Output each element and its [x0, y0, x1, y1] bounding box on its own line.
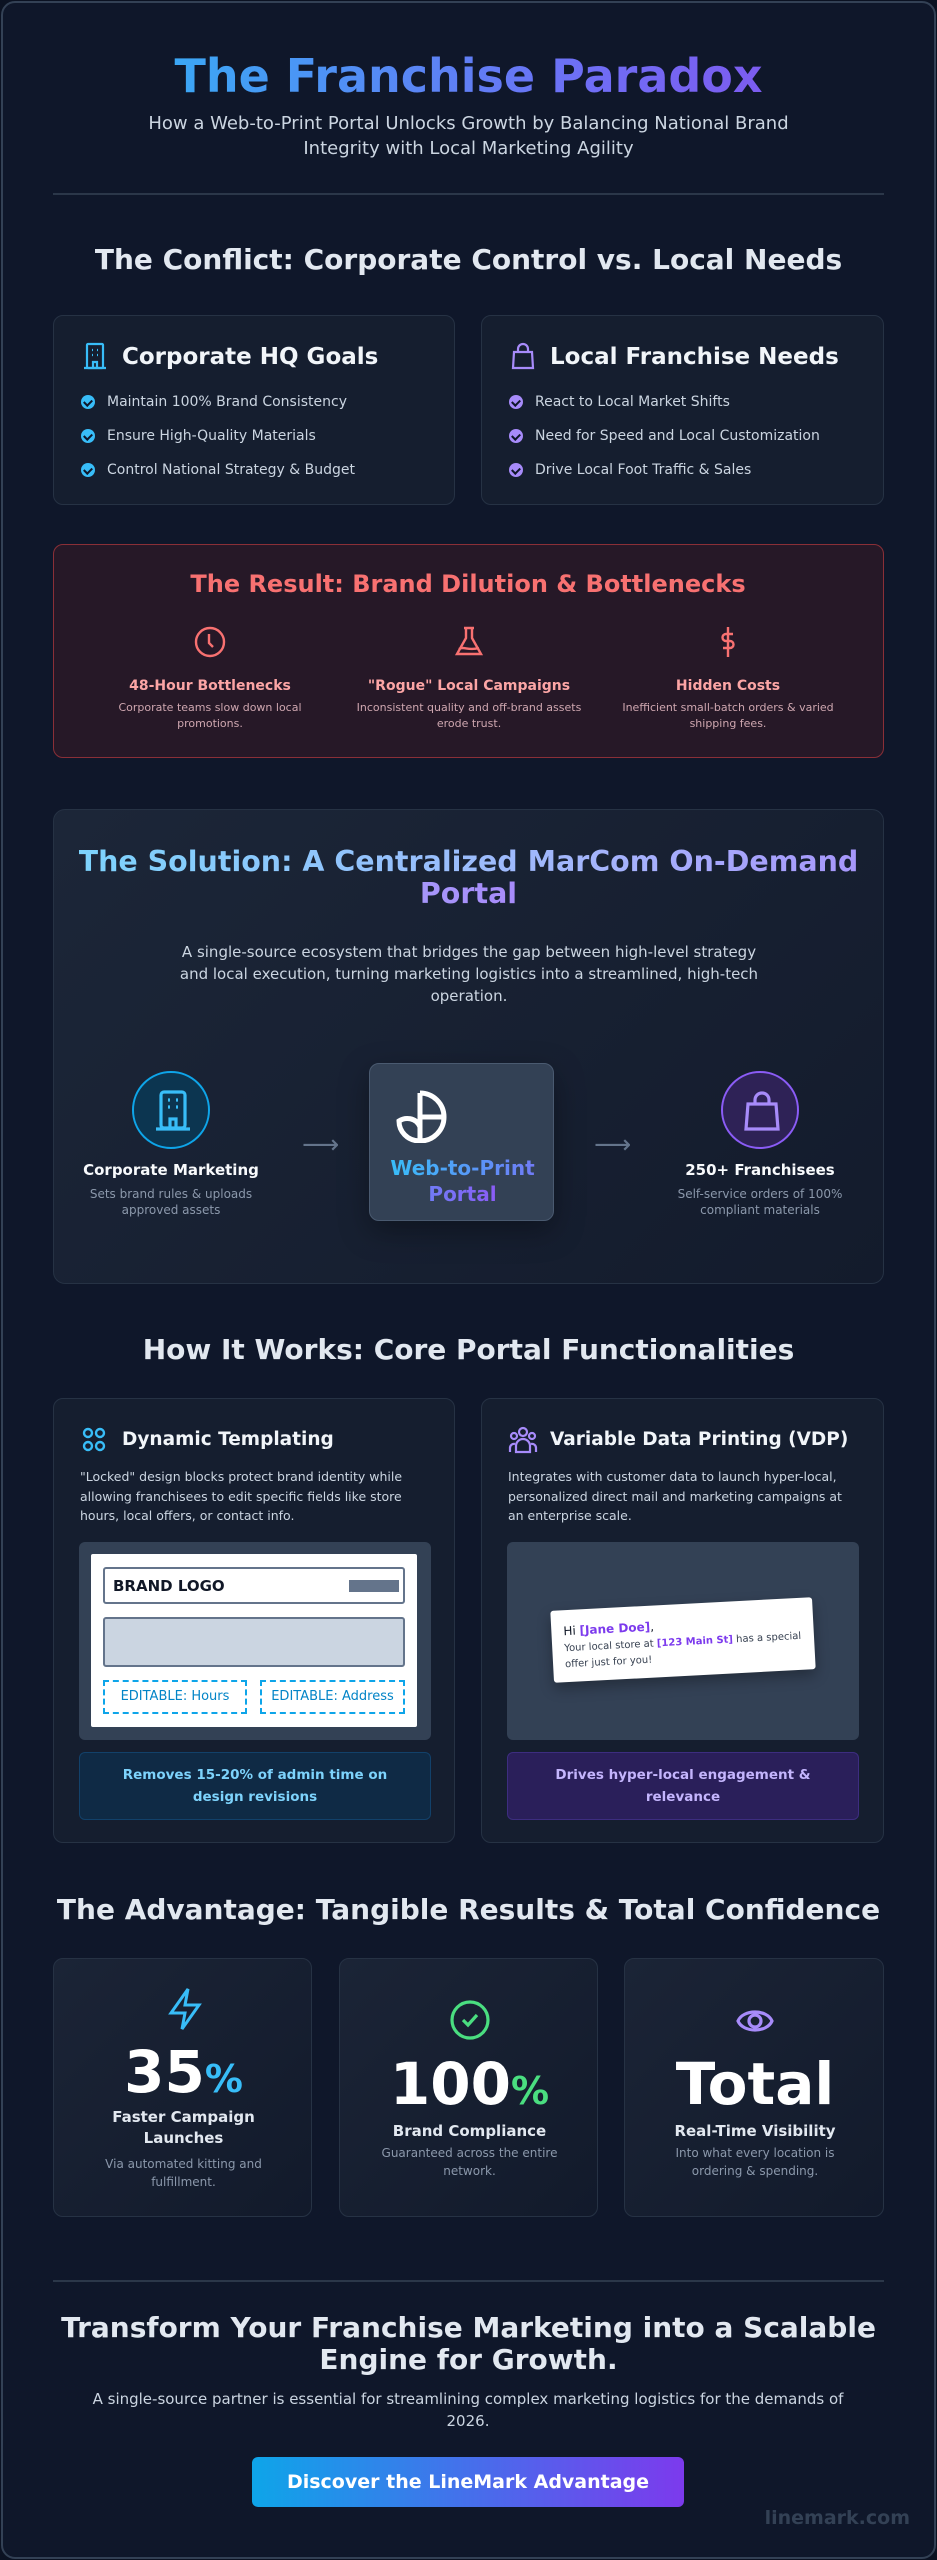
stat card: total: [624, 1958, 884, 2217]
arrow: ⟶: [594, 1130, 631, 1160]
item: rogue campaigns: "Rogue" Local Campaigns: [368, 678, 570, 694]
stat card: 100%: Brand Compliance: [393, 2122, 546, 2140]
icon: building: [84, 342, 106, 370]
icon: flask: [455, 626, 483, 656]
card description: Integrates with customer data to launch hyper-local, personalized direct mail and marketing campaigns at an enterprise scale.: [508, 1469, 842, 1523]
card heading: Local Franchise Needs: [550, 344, 839, 370]
flow: franchisees: [678, 1071, 842, 1217]
icon: grid: [82, 1428, 106, 1452]
stat card: total: Real-Time Visibility: [674, 2122, 836, 2140]
flow: corporate marketing: Sets brand rules & uploads approved assets: [90, 1187, 252, 1217]
subtitle: How a Web-to-Print Portal Unlocks Growth by Balancing National Brand Integrity with Local Marketing Agility: [148, 113, 789, 159]
heading: how it works: How It Works: Core Portal Functionalities: [143, 1333, 794, 1366]
icon: dollar: [721, 627, 735, 657]
flow: corporate marketing: Corporate Marketing: [83, 1161, 259, 1179]
item: bottlenecks: 48-Hour Bottlenecks: [129, 678, 291, 694]
flow: franchisees: 250+ Franchisees: [685, 1161, 835, 1179]
stat callout: Removes 15-20% of admin time on: [123, 1767, 387, 1783]
icon: check circle: [450, 2000, 490, 2040]
template mockup: [79, 1542, 431, 1740]
panel: result: [53, 544, 884, 758]
stat card: 100%: [339, 1958, 598, 2217]
icon: building circle: [132, 1071, 210, 1149]
flow: franchisees: Self-service orders of 100% compliant materials: [678, 1187, 842, 1217]
panel: dynamic templating: [53, 1398, 455, 1843]
item: rogue campaigns: Inconsistent quality and off-brand assets erode trust.: [357, 701, 581, 730]
title: The Franchise Paradox: [174, 49, 763, 103]
CTA button: Discover the LineMark Advantage: [287, 2471, 649, 2493]
icon: eye: [736, 2010, 774, 2032]
bullet list: Drive Local Foot Traffic & Sales: [535, 462, 751, 478]
icon: clock: [194, 626, 226, 658]
heading: conflict: The Conflict: Corporate Control vs. Local Needs: [95, 243, 842, 276]
icon: bag circle: [721, 1071, 799, 1149]
template mockup: BRAND LOGO: [113, 1577, 225, 1595]
footer brand: linemark.com: [765, 2507, 910, 2529]
heading: advantage: The Advantage: Tangible Results & Total Confidence: [57, 1893, 880, 1926]
item: bottlenecks: Corporate teams slow down local promotions.: [118, 701, 302, 730]
icon: people: [508, 1426, 538, 1454]
postcard mockup: Your local store at [123 Main St] has a special offer just for you!: [564, 1631, 801, 1670]
flow: portal box: Web-to-Print Portal: [390, 1156, 535, 1206]
flow: corporate marketing: [83, 1071, 259, 1217]
stat card: 35%: 35%: [124, 2038, 243, 2106]
card heading: Dynamic Templating: [122, 1429, 334, 1450]
stat callout: [507, 1752, 859, 1820]
template mockup: EDITABLE: Address: [271, 1689, 394, 1704]
item: hidden costs: Inefficient small-batch orders & varied shipping fees.: [622, 701, 834, 730]
panel: solution: [53, 809, 884, 1284]
panel: corporate HQ goals: [53, 315, 455, 505]
stat card: 100%: Guaranteed across the entire network.: [382, 2146, 557, 2178]
flow: portal box: [369, 1063, 554, 1221]
stat card: total: Into what every location is ordering & spending.: [675, 2146, 835, 2178]
arrow: ⟶: [302, 1130, 339, 1160]
CTA text: A single-source partner is essential for streamlining complex marketing logistics for the demands of 2026.: [93, 2390, 843, 2430]
bullet list: Need for Speed and Local Customization: [535, 428, 820, 444]
stat card: 35%: [53, 1958, 312, 2217]
bullet list: Maintain 100% Brand Consistency: [107, 394, 347, 410]
stat callout: Drives hyper-local engagement &: [555, 1767, 811, 1783]
solution heading: The Solution: A Centralized MarCom On-Demand Portal: [79, 845, 858, 910]
bullet list: Ensure High-Quality Materials: [107, 428, 316, 444]
stat callout: [79, 1752, 431, 1820]
stat card: 35%: Via automated kitting and fulfillment.: [105, 2157, 262, 2189]
icon: bag: [512, 342, 534, 370]
CTA button: [252, 2457, 684, 2507]
panel: variable data printing: [481, 1398, 884, 1843]
postcard mockup: Hi [Jane Doe],: [563, 1620, 654, 1638]
bullet list: [81, 394, 355, 478]
card heading: Variable Data Printing (VDP): [550, 1429, 848, 1450]
CTA heading: Transform Your Franchise Marketing into a Scalable Engine for Growth.: [61, 2311, 876, 2376]
result heading: The Result: Brand Dilution & Bottlenecks: [190, 570, 746, 598]
stat card: 100%: 100%: [390, 2050, 549, 2118]
bullet list: [509, 394, 820, 478]
icon: portal logo: [396, 1090, 446, 1143]
item: hidden costs: [622, 627, 834, 730]
item: hidden costs: Hidden Costs: [676, 678, 780, 694]
item: rogue campaigns: [357, 626, 581, 730]
postcard mockup: [507, 1542, 859, 1740]
panel: local franchise needs: [481, 315, 884, 505]
template mockup: EDITABLE: Hours: [121, 1689, 229, 1704]
stat callout: design revisions: [193, 1789, 317, 1805]
icon: lightning: [168, 1988, 202, 2030]
bullet list: Control National Strategy & Budget: [107, 462, 355, 478]
solution description: A single-source ecosystem that bridges the gap between high-level strategy and local execution, turning marketing logistics into a streamlined, high-tech operation.: [180, 943, 758, 1005]
card description: "Locked" design blocks protect brand identity while allowing franchisees to edit specific fields like store hours, local offers, or contact info.: [80, 1469, 402, 1523]
stat card: 35%: Faster Campaign Launches: [112, 2108, 255, 2147]
card heading: Corporate HQ Goals: [122, 344, 378, 370]
stat card: total: Total: [676, 2050, 834, 2118]
bullet list: React to Local Market Shifts: [535, 394, 730, 410]
stat callout: relevance: [646, 1789, 720, 1805]
item: bottlenecks: [118, 626, 302, 730]
